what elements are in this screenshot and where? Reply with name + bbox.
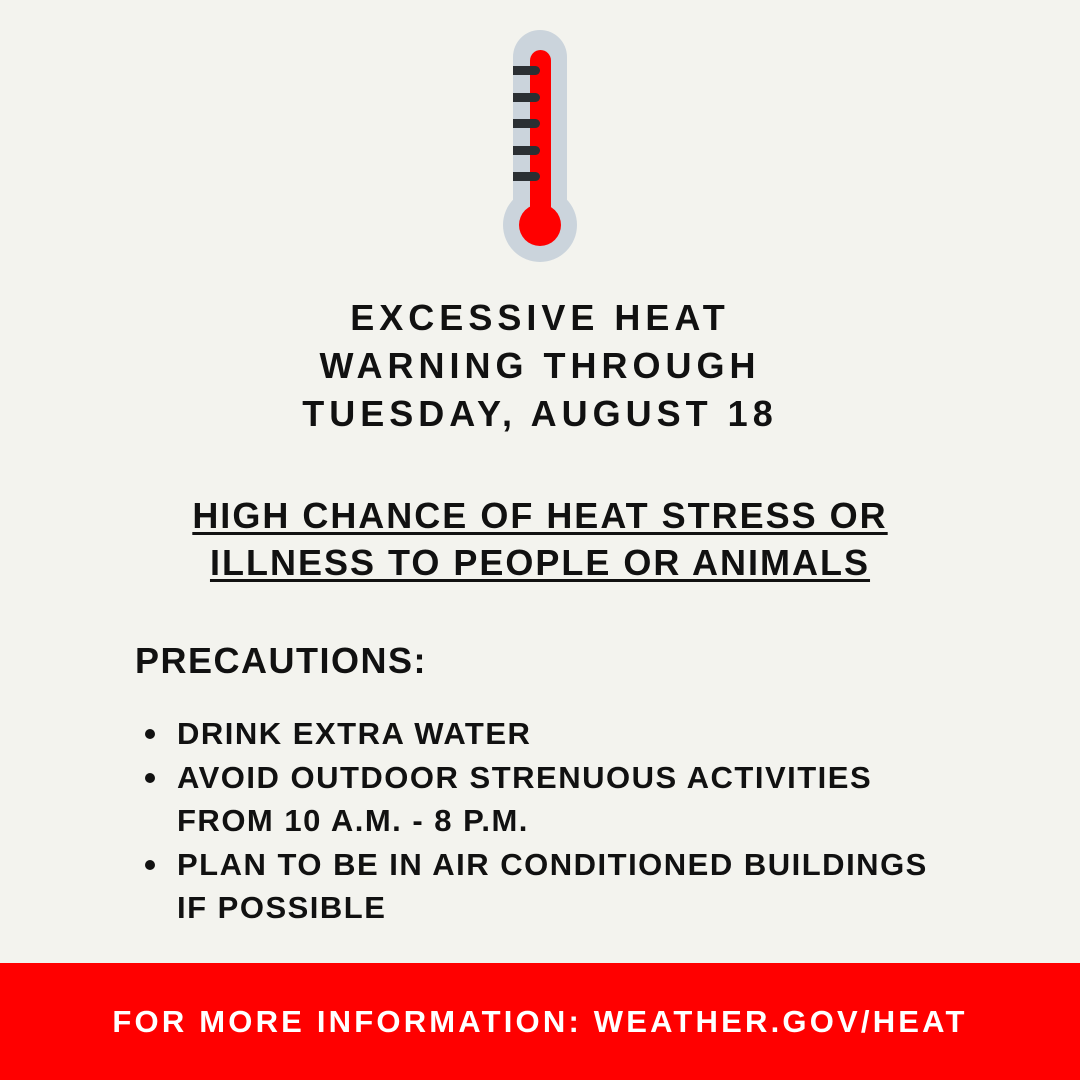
list: precautions: DRINK EXTRA WATER xyxy=(177,716,531,751)
icon: thermometer xyxy=(503,30,577,262)
list: precautions: IF POSSIBLE xyxy=(177,890,386,925)
footer banner: FOR MORE INFORMATION: WEATHER.GOV/HEAT xyxy=(112,1004,968,1039)
list: precautions xyxy=(145,716,928,925)
list: precautions: FROM 10 A.M. - 8 P.M. xyxy=(177,803,529,838)
subtitle xyxy=(192,495,888,583)
heading: precautions: PRECAUTIONS: xyxy=(135,640,427,681)
subtitle: ILLNESS TO PEOPLE OR ANIMALS xyxy=(210,542,870,583)
footer banner xyxy=(0,963,1080,1080)
title xyxy=(302,297,778,434)
list: precautions: AVOID OUTDOOR STRENUOUS ACTIVITIES xyxy=(177,760,872,794)
title: WARNING THROUGH xyxy=(320,345,760,386)
title: EXCESSIVE HEAT xyxy=(350,297,730,338)
list: precautions: PLAN TO BE IN AIR CONDITIONED BUILDINGS xyxy=(177,846,928,882)
subtitle: HIGH CHANCE OF HEAT STRESS OR xyxy=(192,495,888,536)
title: TUESDAY, AUGUST 18 xyxy=(302,393,778,434)
